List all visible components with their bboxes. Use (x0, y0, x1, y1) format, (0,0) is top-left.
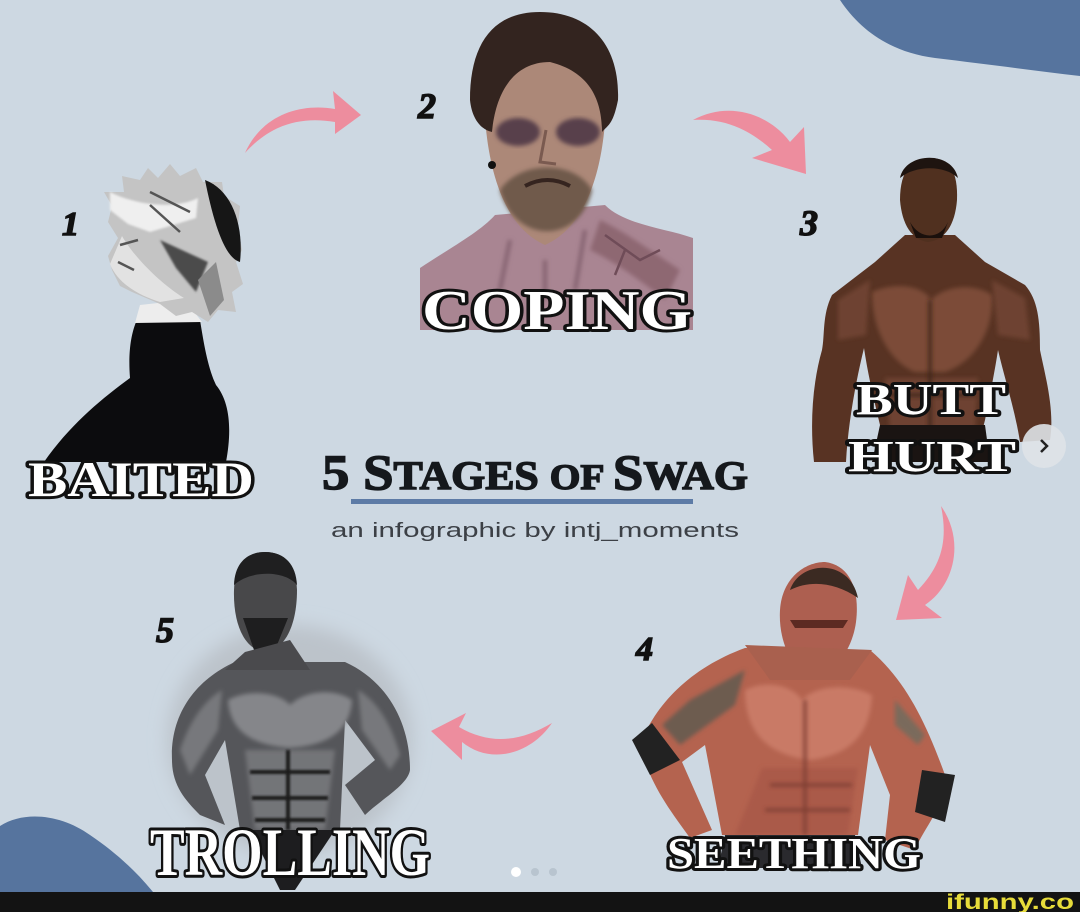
label: butt hurt: HURT (848, 432, 1016, 481)
arrow: 3 to 4 (896, 506, 954, 620)
subtitle: an infographic by intj_moments (331, 520, 739, 542)
arrow: 4 to 5 (431, 713, 552, 760)
figure 4: seething (632, 562, 955, 868)
arrow: 2 to 3 (693, 111, 806, 174)
number 4: 4 (635, 631, 653, 668)
label: butt hurt: BUTT (856, 375, 1006, 424)
arrow: 1 to 2 (245, 91, 361, 153)
label: coping: COPING (422, 280, 692, 342)
label: seething: SEETHING (667, 829, 921, 878)
carousel dots (511, 867, 557, 877)
title: 5 STAGES OF SWAG (322, 444, 748, 500)
number 1: 1 (62, 206, 79, 243)
label: trolling: TROLLING (150, 814, 430, 890)
number 3: 3 (799, 203, 818, 243)
title underline (351, 499, 693, 504)
blob: bottom left (0, 816, 153, 892)
number 2: 2 (417, 86, 436, 126)
number 5: 5 (156, 610, 174, 650)
blob: top right (840, 0, 1080, 76)
figure 2: coping (420, 12, 693, 330)
figure 1: baited (44, 164, 243, 462)
carousel next button (1022, 424, 1066, 468)
figure 5: trolling (168, 552, 412, 890)
label: baited: BAITED (28, 451, 254, 507)
figure 3: butt hurt (812, 158, 1051, 462)
label: butt hurt (848, 375, 1016, 481)
footer bar (0, 892, 1080, 912)
